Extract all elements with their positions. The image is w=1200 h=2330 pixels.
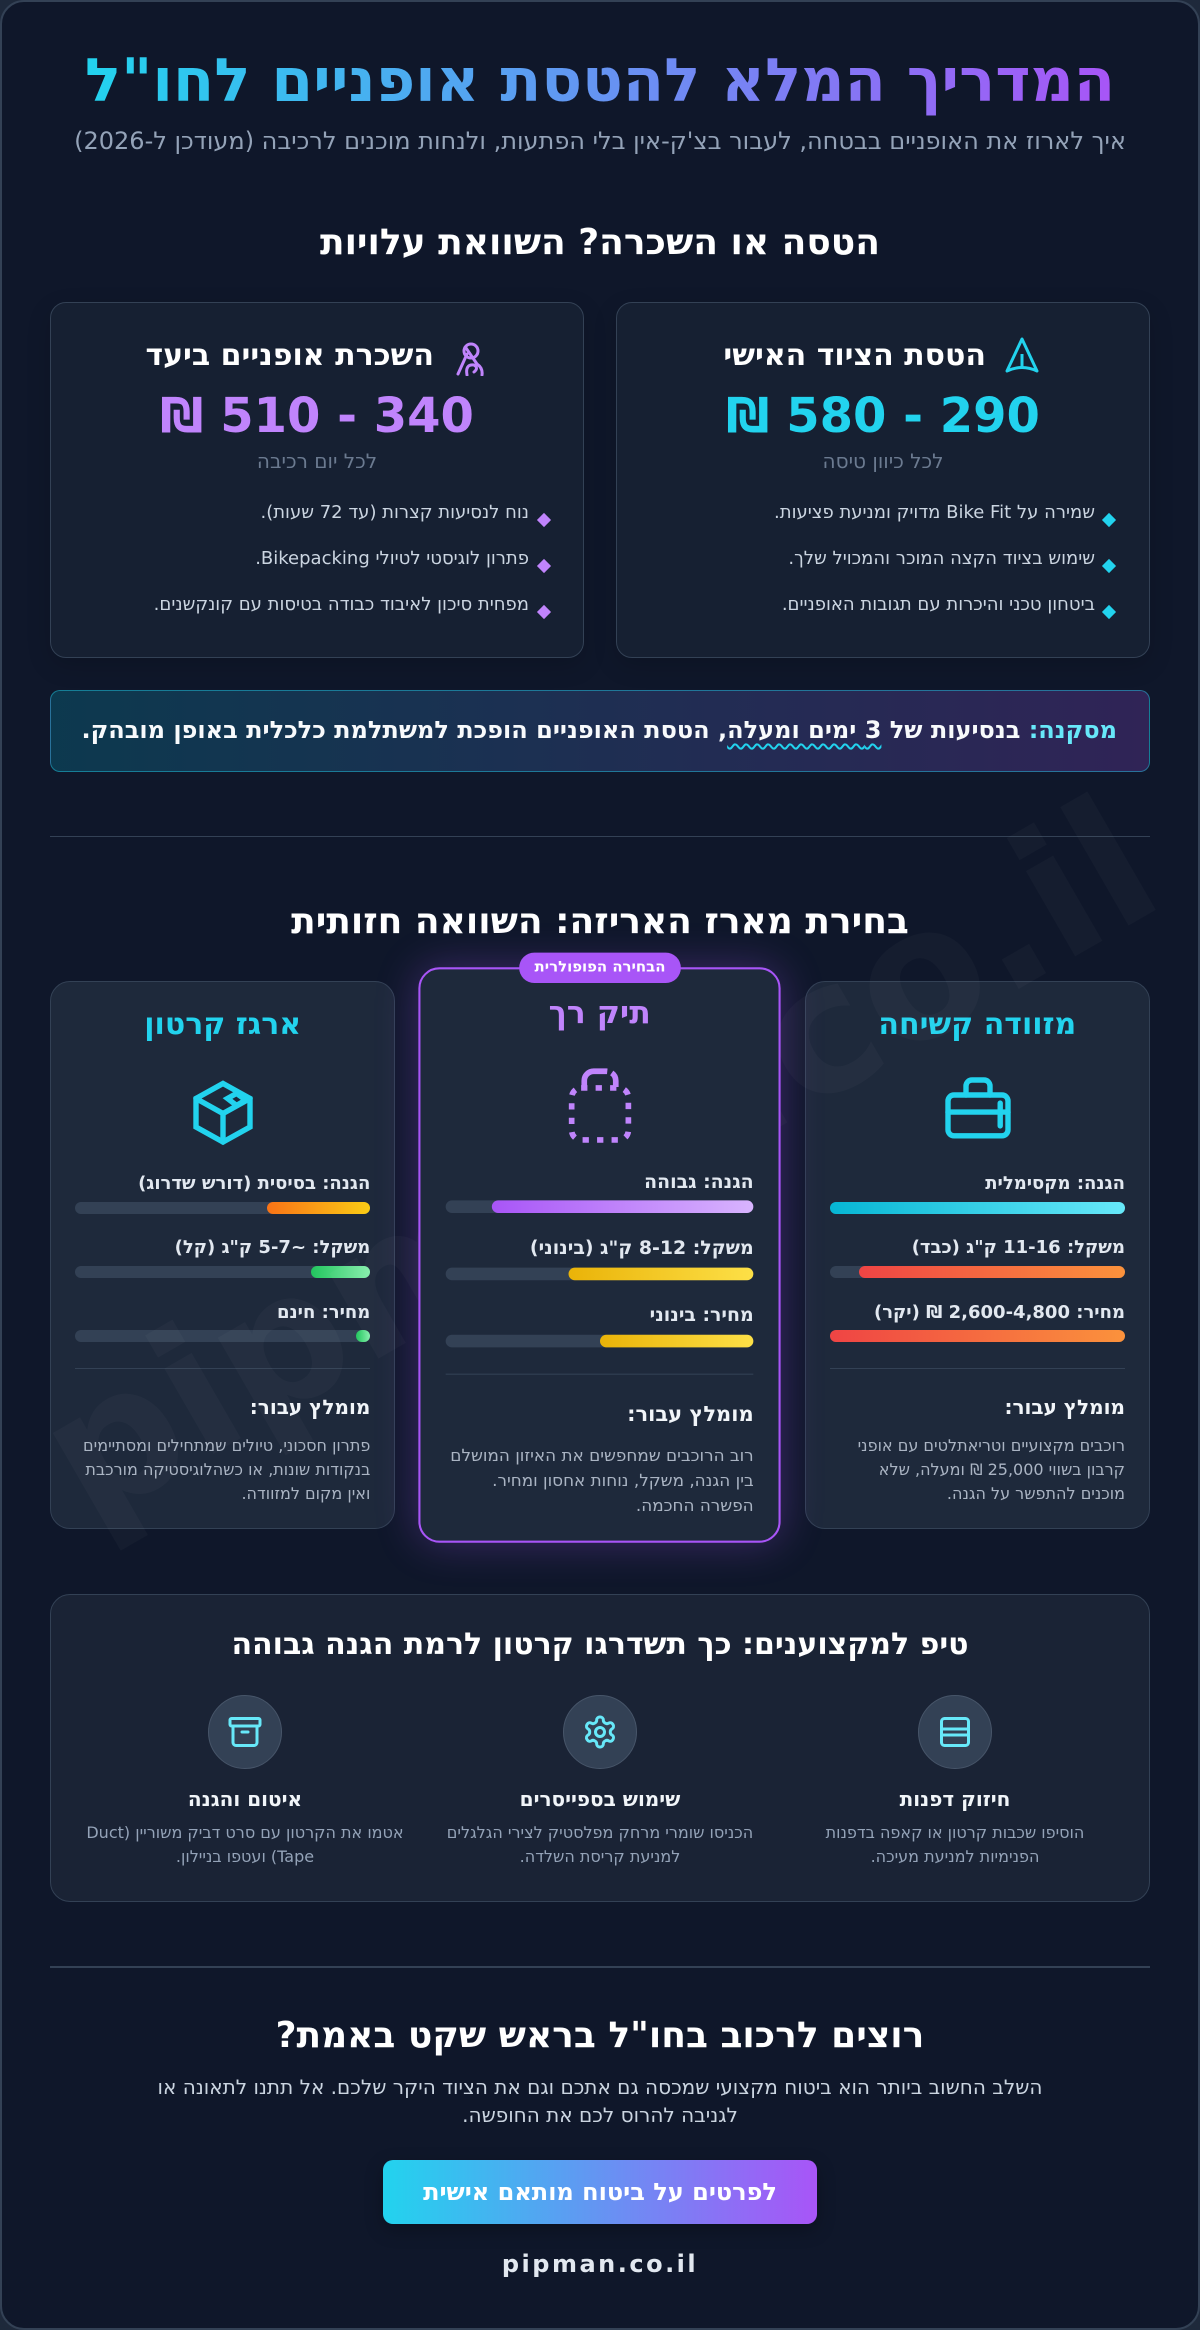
icon: archive bbox=[208, 1695, 282, 1769]
heading: pro tip: טיפ למקצוענים: כך תשדרגו קרטון לרמת הגנה גבוהה bbox=[231, 1627, 969, 1662]
benefits list: נוח לנסיעות קצרות (עד 72 שעות). bbox=[260, 502, 529, 523]
tip title: חיזוק דפנות bbox=[900, 1787, 1010, 1811]
heading: call to action: רוצים לרכוב בחו"ל בראש שקט באמת? bbox=[276, 2015, 924, 2056]
site url: pipman.co.il bbox=[502, 2250, 698, 2278]
price: 340 - 510 ₪ bbox=[160, 388, 474, 444]
metric: protection: הגנה: גבוהה bbox=[644, 1171, 754, 1193]
icon: suitcase bbox=[945, 1077, 1011, 1138]
recommended for: מומלץ עבור: bbox=[1004, 1395, 1125, 1419]
benefits list: מפחית סיכון לאיבוד כבודה בטיסות עם קונקשנים. bbox=[154, 594, 529, 615]
card heading: הטסת הציוד האישי bbox=[723, 338, 986, 373]
description: ואין מקום למזוודה. bbox=[241, 1484, 370, 1503]
panel: pro tip bbox=[50, 1594, 1150, 1902]
badge bbox=[519, 953, 681, 983]
panel: soft bag (most popular) bbox=[419, 967, 781, 1543]
metric: price: מחיר: 2,600-4,800 ₪ (יקר) bbox=[874, 1302, 1125, 1322]
tip text: הוסיפו שכבות קרטון או קאפה בדפנות הפנימיות למניעת מעיכה. bbox=[826, 1822, 1084, 1866]
heading: flight or rental: הטסה או השכרה? השוואת עלויות bbox=[320, 222, 880, 263]
price caption: לכל כיוון טיסה bbox=[823, 449, 943, 473]
description: בנקודות שונות, או כשהלוגיסטיקה מורכבת bbox=[85, 1460, 370, 1479]
recommended for: מומלץ עבור: bbox=[627, 1401, 754, 1426]
panel: fly your own gear bbox=[616, 302, 1150, 658]
watermark: pipman.co.il bbox=[6, 759, 1190, 1563]
metric: price: מחיר: בינוני bbox=[650, 1304, 754, 1326]
badge: הבחירה הפופולרית bbox=[535, 959, 666, 976]
panel: cardboard box bbox=[50, 981, 395, 1529]
tip title: שימוש בספייסרים bbox=[520, 1787, 680, 1811]
callout: conclusion: מסקנה: בנסיעות של 3 ימים ומעלה, הטסת האופניים הופכת למשתלמת כלכלית באופן מובהק. bbox=[82, 716, 1117, 744]
icon: box bbox=[193, 1080, 253, 1146]
card title: ארגז קרטון bbox=[144, 1007, 301, 1042]
callout: conclusion bbox=[50, 690, 1150, 772]
benefits list: שמירה על Bike Fit מדויק ומניעת פציעות. bbox=[774, 502, 1095, 523]
description: מוכנים להתפשר על הגנה. bbox=[947, 1484, 1125, 1503]
metric: price: מחיר: חינם bbox=[277, 1302, 370, 1322]
description: רוכבים מקצועיים וטריאתלטים עם אופני bbox=[858, 1436, 1125, 1455]
metric: weight: משקל: 11-16 ק"ג (כבד) bbox=[912, 1237, 1125, 1258]
title: המדריך המלא להטסת אופניים לחו"ל bbox=[85, 46, 1115, 116]
panel: hard case bbox=[805, 981, 1150, 1529]
metric: weight: משקל: 8-12 ק"ג (בינוני) bbox=[530, 1237, 754, 1259]
icon: rental bike bbox=[456, 342, 484, 376]
button: insurance details: לפרטים על ביטוח מותאם אישית bbox=[423, 2178, 777, 2206]
icon: gear bbox=[563, 1695, 637, 1769]
text block: call to action: השלב החשוב ביותר הוא ביטוח מקצועי שמכסה גם אתכם וגם את הציוד היקר שלכם. אל תתנו לתאונה או לגניבה להרוס לכם את החופשה. bbox=[158, 2075, 1042, 2127]
price: 290 - 580 ₪ bbox=[726, 388, 1040, 444]
description: קרבון בשווי 25,000 ₪ ומעלה, שלא bbox=[879, 1460, 1125, 1479]
description: פתרון חסכוני, טיולים שמתחילים ומסתיימים bbox=[83, 1436, 370, 1455]
price caption: לכל יום רכיבה bbox=[257, 449, 377, 473]
benefits list bbox=[154, 502, 551, 619]
description bbox=[451, 1445, 754, 1515]
tip title: איטום והגנה bbox=[188, 1787, 302, 1811]
tip text: אטמו את הקרטון עם סרט דביק משוריין (Duct Tape) ועטפו בניילון. bbox=[86, 1822, 404, 1866]
icon: layers bbox=[918, 1695, 992, 1769]
description: רוב הרוכבים שמחפשים את האיזון המושלם bbox=[451, 1445, 754, 1465]
tip: spacers bbox=[447, 1695, 753, 1866]
tip: reinforce walls bbox=[826, 1695, 1084, 1866]
benefits list bbox=[774, 502, 1116, 619]
button: insurance details bbox=[383, 2160, 817, 2224]
metric: weight: משקל: ~5-7 ק"ג (קל) bbox=[175, 1237, 370, 1258]
card heading: השכרת אופניים ביעד bbox=[145, 338, 434, 373]
benefits list: ביטחון טכני והיכרות עם תגובות האופניים. bbox=[782, 594, 1095, 615]
description bbox=[83, 1436, 370, 1503]
metric: protection: הגנה: בסיסית (דורש שדרוג) bbox=[138, 1173, 370, 1194]
icon: dashed bag bbox=[568, 1068, 632, 1143]
description bbox=[858, 1436, 1125, 1503]
card title: תיק רך bbox=[549, 995, 651, 1031]
panel: rent a bike at destination bbox=[50, 302, 584, 658]
description: בין הגנה, משקל, נוחות אחסון ומחיר. bbox=[492, 1470, 754, 1490]
heading: packaging comparison: בחירת מארז האריזה: השוואה חזותית bbox=[291, 901, 909, 942]
description: הפשרה החכמה. bbox=[636, 1495, 754, 1515]
benefits list: שימוש בציוד הקצה המוכר והמכויל שלך. bbox=[788, 548, 1095, 569]
tip text: הכניסו שומרי מרחק מפלסטיק לצירי הגלגלים למניעת קריסת השלדה. bbox=[447, 1822, 753, 1866]
card title: מזוודה קשיחה bbox=[878, 1007, 1076, 1042]
subtitle: איך לארוז את האופניים בבטחה, לעבור בצ'ק-אין בלי הפתעות, ולנחות מוכנים לרכיבה (מעודכן ל-2026) bbox=[74, 127, 1126, 155]
tip: seal and protect bbox=[86, 1695, 404, 1866]
icon: plane arrow bbox=[1006, 338, 1038, 372]
metric: protection: הגנה: מקסימלית bbox=[985, 1173, 1125, 1194]
benefits list: פתרון לוגיסטי לטיולי Bikepacking. bbox=[255, 548, 529, 569]
recommended for: מומלץ עבור: bbox=[250, 1395, 370, 1419]
